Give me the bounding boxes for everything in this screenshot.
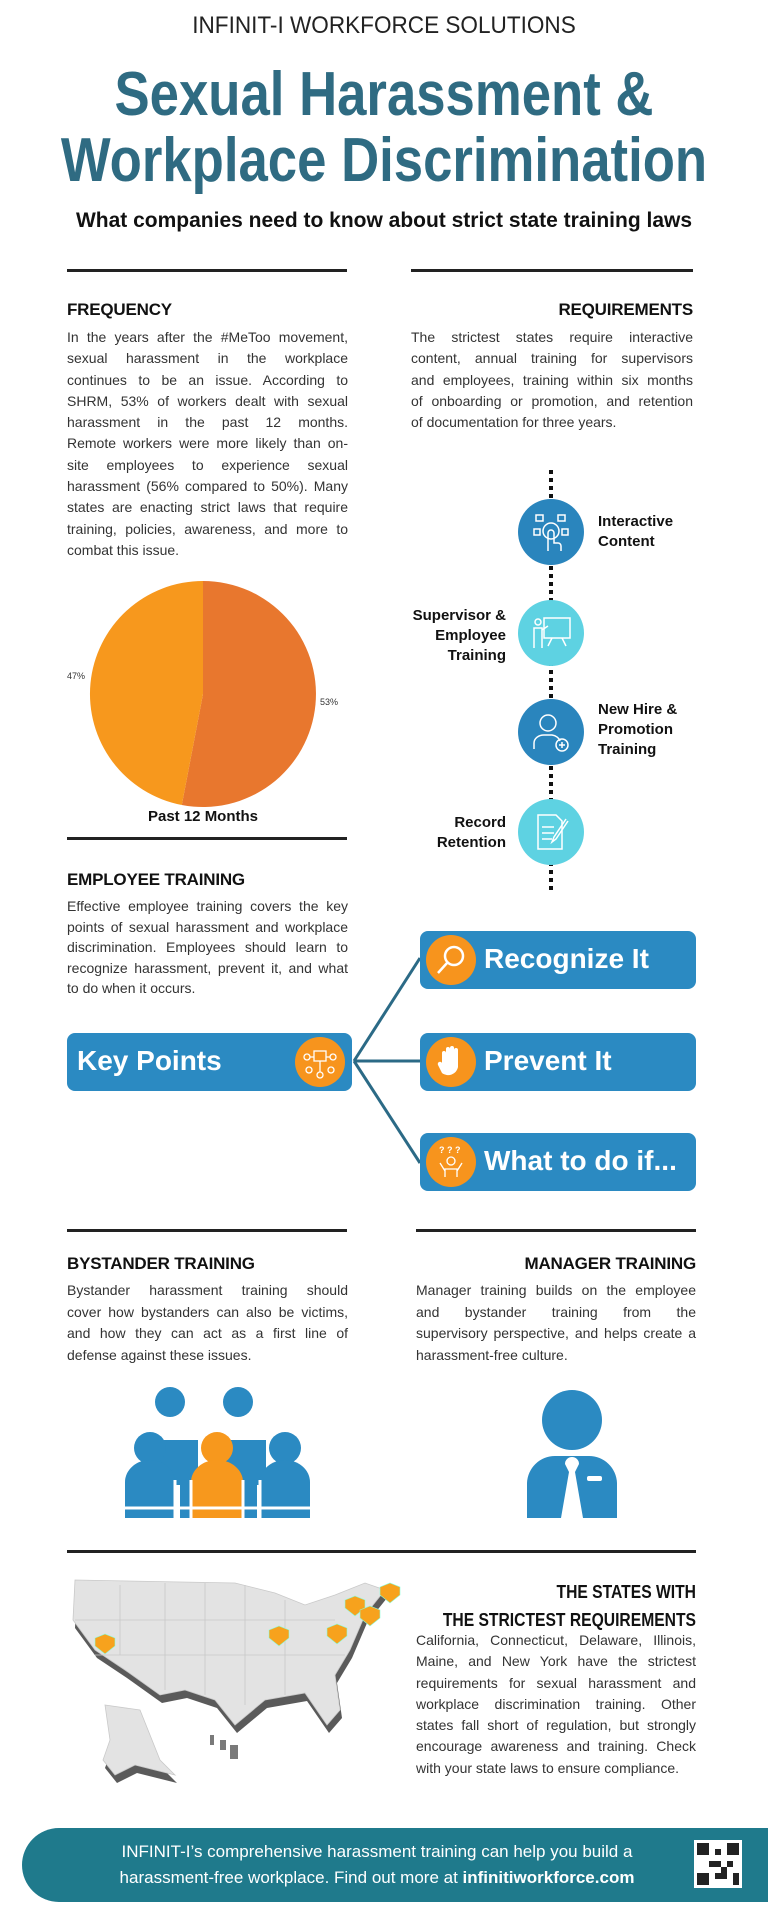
box: recognize it: Recognize It: [484, 943, 649, 974]
text: frequency: combat this issue.: [67, 542, 179, 558]
pie chart: [67, 581, 338, 825]
heading: states with strictest requirements: [443, 1582, 696, 1630]
icon: manager: [527, 1390, 617, 1518]
box: prevent it: [420, 1033, 696, 1091]
text: requirements: The strictest states require interactive: [411, 329, 693, 345]
label: interactive content: Content: [598, 533, 655, 550]
map: USA with marked states: [72, 1580, 400, 1783]
text: states: Maine, and New York have the strictest: [416, 1653, 696, 1669]
label: record retention: Retention: [437, 834, 506, 851]
heading: frequency: FREQUENCY: [67, 300, 172, 319]
title: Workplace Discrimination: [61, 126, 707, 195]
timeline: requirements: [549, 470, 553, 890]
text: employee training: to do when it occurs.: [67, 980, 195, 996]
box: key points: [67, 1033, 352, 1091]
text: states: states fall short of regulation, but strongly: [416, 1717, 696, 1733]
box: what to do if: ? ? ?: [439, 1145, 460, 1155]
text: requirements: and employees, training within six months: [411, 372, 693, 388]
text: manager: supervisory perspective, and helps create a: [416, 1325, 696, 1341]
text: frequency: SHRM, 53% of workers dealt with sexual: [67, 393, 348, 409]
text: frequency: harassment (56% compared to 50%). Many: [67, 478, 348, 494]
box: prevent it: Prevent It: [484, 1045, 612, 1076]
text: bystander: Bystander harassment training should: [67, 1282, 348, 1298]
pie chart: 47%: [67, 671, 85, 681]
text: bystander: defense against these issues.: [67, 1347, 251, 1363]
footer text: [120, 1842, 634, 1887]
text: frequency: Remote workers were more likely than on-: [67, 435, 348, 451]
subtitle: What companies need to know about strict state training laws: [76, 209, 692, 232]
title: [60, 60, 707, 195]
text: manager: harassment-free culture.: [416, 1347, 568, 1363]
label: supervisor & employee training: Training: [448, 647, 506, 664]
icon: group of people: [125, 1387, 310, 1518]
text: employee training: [67, 898, 348, 996]
text: manager: [416, 1282, 696, 1363]
text: frequency: [67, 329, 348, 558]
text: frequency: training, policies, awareness, and more to: [67, 521, 348, 537]
icon: new hire: [518, 699, 584, 765]
label: new hire & promotion training: Training: [598, 741, 656, 758]
text: bystander: and how they can act as a first line of: [67, 1325, 348, 1341]
pie chart: 53%: [320, 697, 338, 707]
label: new hire & promotion training: New Hire &: [598, 701, 677, 718]
label: new hire & promotion training: [598, 701, 677, 758]
icon: record retention: [518, 799, 584, 865]
footer banner: [22, 1828, 768, 1902]
box: key points: Key Points: [77, 1045, 222, 1076]
text: employee training: Effective employee training covers the key: [67, 898, 348, 914]
text: requirements: of onboarding or promotion, and retention: [411, 393, 693, 409]
title: Sexual Harassment &: [115, 60, 653, 129]
text: requirements: [411, 329, 693, 430]
text: frequency: sexual harassment in the workplace: [67, 350, 348, 366]
heading: employee training: EMPLOYEE TRAINING: [67, 870, 245, 889]
text: bystander: [67, 1282, 348, 1363]
heading: bystander training: BYSTANDER TRAINING: [67, 1254, 255, 1273]
label: supervisor & employee training: [413, 607, 506, 664]
label: record retention: [437, 814, 506, 851]
text: requirements: of documentation for three years.: [411, 414, 616, 430]
heading: states with strictest requirements: THE STRICTEST REQUIREMENTS: [443, 1610, 696, 1630]
text: employee training: recognize harassment, prevent it, and what: [67, 960, 348, 976]
text: states: requirements for sexual harassment and: [416, 1675, 696, 1691]
icon: interactive content: [518, 499, 584, 565]
box: what to do if: What to do if...: [484, 1145, 677, 1176]
QR code: [694, 1840, 742, 1888]
pie chart: Past 12 Months: [148, 808, 258, 825]
text: manager: Manager training builds on the employee: [416, 1282, 696, 1298]
label: interactive content: [598, 513, 673, 550]
text: states: encourage awareness and training. Check: [416, 1738, 696, 1754]
icon: supervisor training: [518, 600, 584, 666]
text: states: California, Connecticut, Delaware, Illinois,: [416, 1632, 696, 1648]
heading: requirements: REQUIREMENTS: [558, 300, 693, 319]
box: what to do if: [420, 1133, 696, 1191]
text: frequency: states are enacting strict laws that require: [67, 499, 348, 515]
icon: key points network: [295, 1037, 345, 1087]
label: supervisor & employee training: Employee: [435, 627, 506, 644]
label: record retention: Record: [454, 814, 506, 831]
box: recognize it: [420, 931, 696, 989]
label: new hire & promotion training: Promotion: [598, 721, 673, 738]
text: frequency: site employees to experience sexual: [67, 457, 348, 473]
footer text: harassment-free workplace. Find out more at infinitiworkforce.com: [120, 1868, 634, 1887]
text: employee training: discrimination. Employees should learn to: [67, 939, 348, 955]
connector lines: [352, 957, 420, 1164]
text: states: with your state laws to ensure compliance.: [416, 1760, 679, 1776]
label: interactive content: Interactive: [598, 513, 673, 530]
header brand: INFINIT-I WORKFORCE SOLUTIONS: [192, 12, 576, 39]
text: manager: and bystander training from the: [416, 1304, 696, 1320]
label: supervisor & employee training: Supervisor &: [413, 607, 506, 624]
heading: manager training: MANAGER TRAINING: [524, 1254, 696, 1273]
text: employee training: points of sexual harassment and workplace: [67, 918, 348, 934]
footer text: INFINIT-I’s comprehensive harassment training can help you build a: [122, 1842, 632, 1861]
text: states: [416, 1632, 696, 1776]
text: frequency: continues to be an issue. According to: [67, 372, 348, 388]
text: frequency: harassment in the past 12 months.: [67, 414, 348, 430]
text: bystander: cover how bystanders can also be victims,: [67, 1304, 348, 1320]
text: frequency: In the years after the #MeToo movement,: [67, 329, 348, 345]
text: states: workplace discrimination training. Other: [416, 1696, 696, 1712]
heading: states with strictest requirements: THE STATES WITH: [557, 1582, 696, 1602]
text: requirements: content, annual training for supervisors: [411, 350, 693, 366]
